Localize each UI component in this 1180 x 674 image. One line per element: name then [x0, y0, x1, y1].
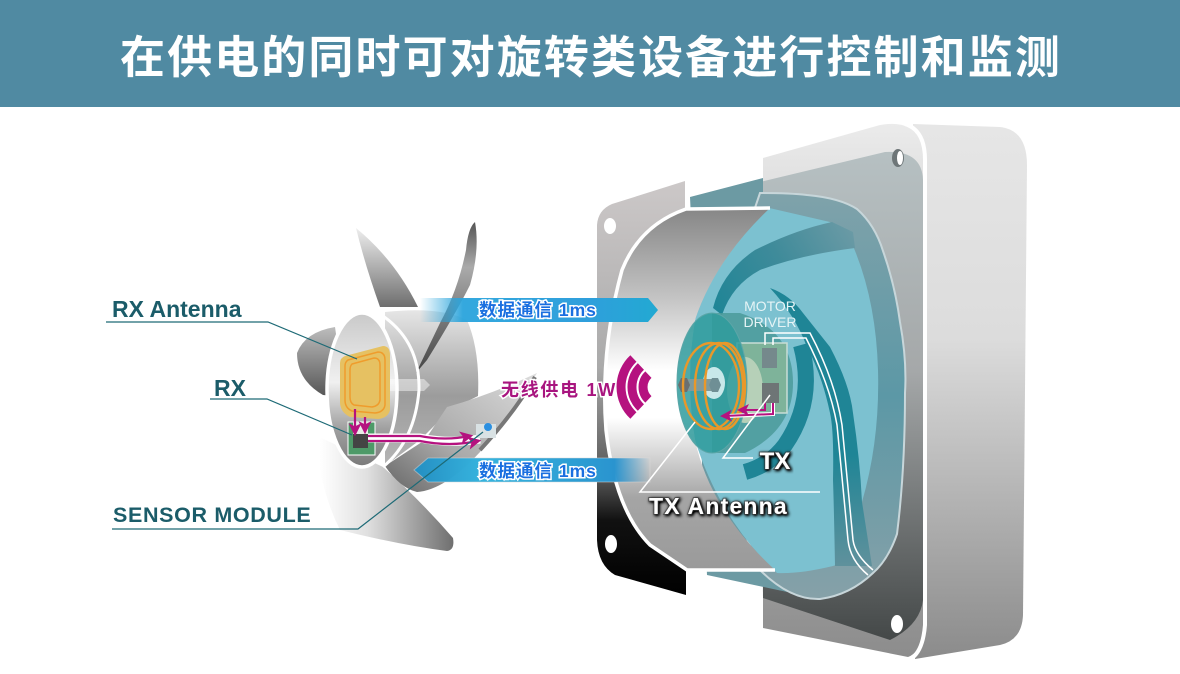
callout: RX Antenna [106, 296, 357, 359]
callout: TX [723, 395, 790, 475]
silver cylinder [605, 208, 775, 570]
shaft [678, 367, 725, 399]
callout: TX Antenna: TX Antenna [649, 493, 788, 519]
callout: RX: RX [214, 375, 247, 401]
data link bar: bottom [414, 458, 650, 482]
rotor hub rear and PCB [712, 313, 793, 453]
rear flange [763, 124, 925, 657]
blade top [356, 228, 418, 307]
RX arrows down [355, 409, 365, 433]
TX to antenna arrows halo [728, 403, 773, 416]
callout: sensor module [112, 432, 483, 529]
mounting holes rear [891, 149, 904, 633]
motor driver label: DRIVER [744, 314, 796, 330]
callout: TX Antenna [640, 422, 820, 519]
callout: RX Antenna: RX Antenna [112, 296, 242, 322]
callout: sensor module: SENSOR MODULE [113, 503, 311, 527]
wireless power label: 无线供电 1W [501, 380, 617, 400]
inner flange face [760, 152, 923, 640]
motor driver label: MOTOR [744, 298, 796, 314]
driver wires [765, 333, 873, 575]
icon: wireless waves [621, 358, 648, 416]
fan impeller [297, 222, 537, 551]
fan blade strips [713, 222, 872, 566]
hub outer ring [380, 314, 419, 467]
teal flange [690, 178, 820, 599]
RX antenna [340, 346, 390, 419]
motor driver label [744, 298, 796, 330]
housing side block [913, 124, 1027, 659]
light blue opening [690, 207, 878, 573]
sensor module [476, 423, 496, 438]
hub cylinder [385, 310, 478, 466]
blade bottom [315, 435, 453, 551]
RX to sensor arrows [368, 436, 480, 444]
hub front face [327, 313, 397, 467]
title banner [0, 0, 1180, 107]
magenta arrows [723, 403, 773, 416]
front flange [597, 181, 686, 595]
mounting holes front [604, 218, 617, 553]
data label bottom: 数据通信 1ms [479, 461, 597, 481]
shaft ghost [355, 379, 430, 391]
data label top: 数据通信 1ms [479, 300, 597, 320]
callout: RX [210, 375, 352, 435]
blade thin upper right [416, 222, 477, 373]
data link bar: top [420, 298, 658, 322]
housing opening [690, 193, 905, 599]
TX antenna coils [683, 343, 745, 429]
callout: TX: TX [760, 448, 790, 475]
fan housing (right side) [597, 124, 1027, 659]
title: 在供电的同时可对旋转类设备进行控制和监测 [120, 32, 1062, 83]
RX board [348, 422, 375, 455]
rotor hub front [677, 313, 747, 453]
blade left [297, 327, 345, 397]
blade right lower [385, 373, 537, 492]
